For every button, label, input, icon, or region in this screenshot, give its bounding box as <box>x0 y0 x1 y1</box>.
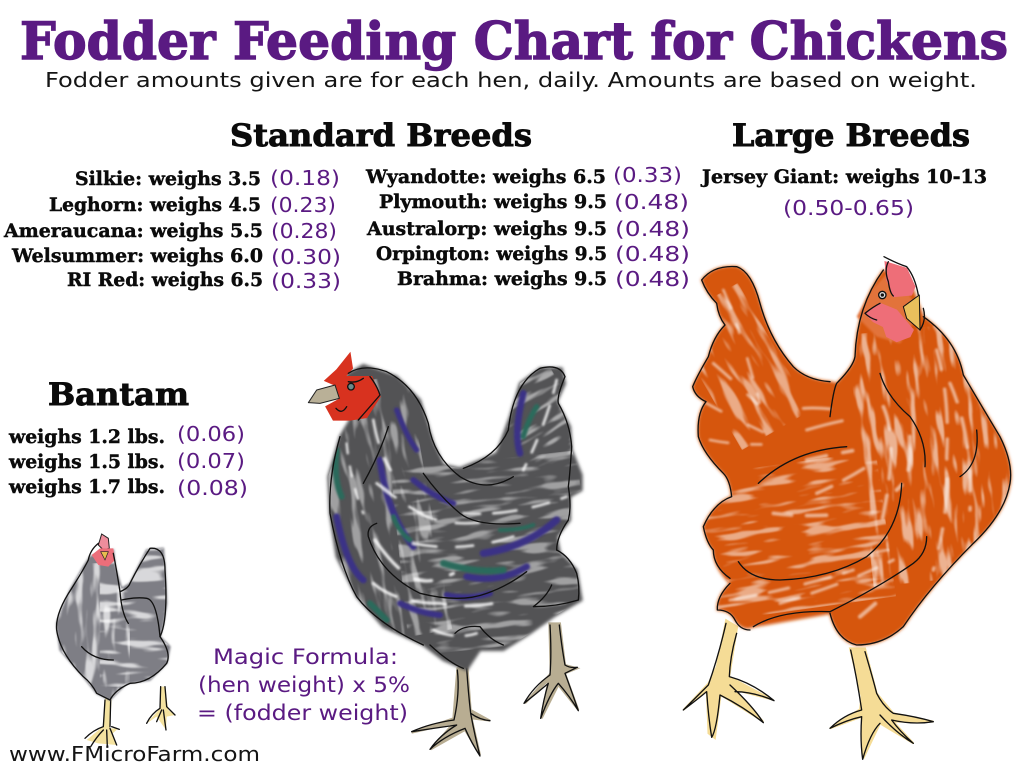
row: Welsummer: (0.30) <box>271 245 341 269</box>
row: Ameraucana: Ameraucana: weighs 5.5 <box>3 220 263 242</box>
heading: bantam: Bantam <box>48 377 189 413</box>
row: Orpington: (0.48) <box>615 242 690 266</box>
formula line 1: Magic Formula: <box>213 645 398 669</box>
right leg <box>830 648 933 759</box>
row: Orpington: Orpington: weighs 9.5 <box>376 243 607 265</box>
row: 1.7 lbs <box>8 476 248 500</box>
row: Silkie <box>75 166 340 190</box>
row: 1.5 lbs: (0.07) <box>177 449 245 473</box>
row: Ameraucana: (0.28) <box>271 219 337 243</box>
row: Orpington <box>376 242 690 266</box>
row: Australorp <box>366 217 690 241</box>
heading: large breeds: Large Breeds <box>732 118 970 154</box>
row: Leghorn <box>49 193 336 217</box>
row: Leghorn: (0.23) <box>270 193 336 217</box>
left leg <box>412 665 490 756</box>
row: Brahma: (0.48) <box>615 267 690 291</box>
row: Silkie: Silkie: weighs 3.5 <box>75 168 261 190</box>
panel: large breeds <box>700 118 987 220</box>
row: Jersey Giant: Jersey Giant: weighs 10-13 <box>700 166 987 188</box>
formula line 3: = (fodder weight) <box>197 701 408 725</box>
row: Plymouth: (0.48) <box>614 190 689 214</box>
row: Plymouth: Plymouth: weighs 9.5 <box>379 191 607 213</box>
row: 1.5 lbs <box>8 449 245 473</box>
row: Wyandotte <box>365 163 682 188</box>
body fill <box>328 365 582 670</box>
row: Welsummer: Welsummer: weighs 6.0 <box>11 245 263 267</box>
row: 1.7 lbs: (0.08) <box>177 476 248 500</box>
legs <box>85 687 175 747</box>
row: RI Red <box>67 269 341 293</box>
row: 1.5 lbs: weighs 1.5 lbs. <box>8 451 165 473</box>
feather highlights <box>57 547 173 697</box>
illustration: bantam hen <box>57 534 175 747</box>
formula line 2: (hen weight) x 5% <box>198 673 410 697</box>
feather texture <box>669 283 1024 622</box>
illustration: black hen <box>308 353 596 756</box>
head <box>857 257 924 343</box>
row: Leghorn: Leghorn: weighs 4.5 <box>49 194 261 216</box>
row: 1.2 lbs: weighs 1.2 lbs. <box>8 426 165 448</box>
body ink outlines <box>693 266 1011 645</box>
row: Brahma: Brahma: weighs 9.5 <box>397 268 607 290</box>
colour sheen and highlights <box>328 368 580 653</box>
row: Plymouth <box>379 190 689 214</box>
body ink outlines <box>330 367 579 668</box>
body fill <box>57 548 170 700</box>
body fill <box>693 266 1011 645</box>
row: 1.2 lbs: (0.06) <box>177 422 245 446</box>
illustration: large orange hen <box>669 257 1024 759</box>
head and comb <box>92 534 115 567</box>
row: RI Red: RI Red: weighs 6.5 <box>67 269 263 291</box>
amount: Jersey Giant: (0.50-0.65) <box>783 196 914 220</box>
panel: bantam <box>8 377 248 500</box>
row: Australorp: Australorp: weighs 9.5 <box>366 218 607 240</box>
subtitle: Fodder amounts given are for each hen, daily. Amounts are based on weight. <box>45 68 977 92</box>
row: Wyandotte: Wyandotte: weighs 6.5 <box>365 166 606 188</box>
body ink outlines <box>57 543 168 700</box>
row: Silkie: (0.18) <box>270 166 340 190</box>
panel: standard breeds <box>3 118 690 293</box>
left leg <box>683 620 774 738</box>
row: Brahma <box>397 267 690 291</box>
row: RI Red: (0.33) <box>271 269 341 293</box>
heading: standard breeds: Standard Breeds <box>230 118 532 154</box>
row: 1.2 lbs <box>8 422 245 448</box>
callout: magic formula <box>197 645 410 725</box>
row: Wyandotte: (0.33) <box>613 163 682 187</box>
row: Australorp: (0.48) <box>615 217 690 241</box>
head and comb <box>308 353 380 420</box>
title: Fodder Feeding Chart for Chickens <box>20 12 1008 72</box>
right leg <box>524 623 578 718</box>
website footer: www.FMicroFarm.com <box>9 742 260 766</box>
row: 1.7 lbs: weighs 1.7 lbs. <box>8 476 165 498</box>
